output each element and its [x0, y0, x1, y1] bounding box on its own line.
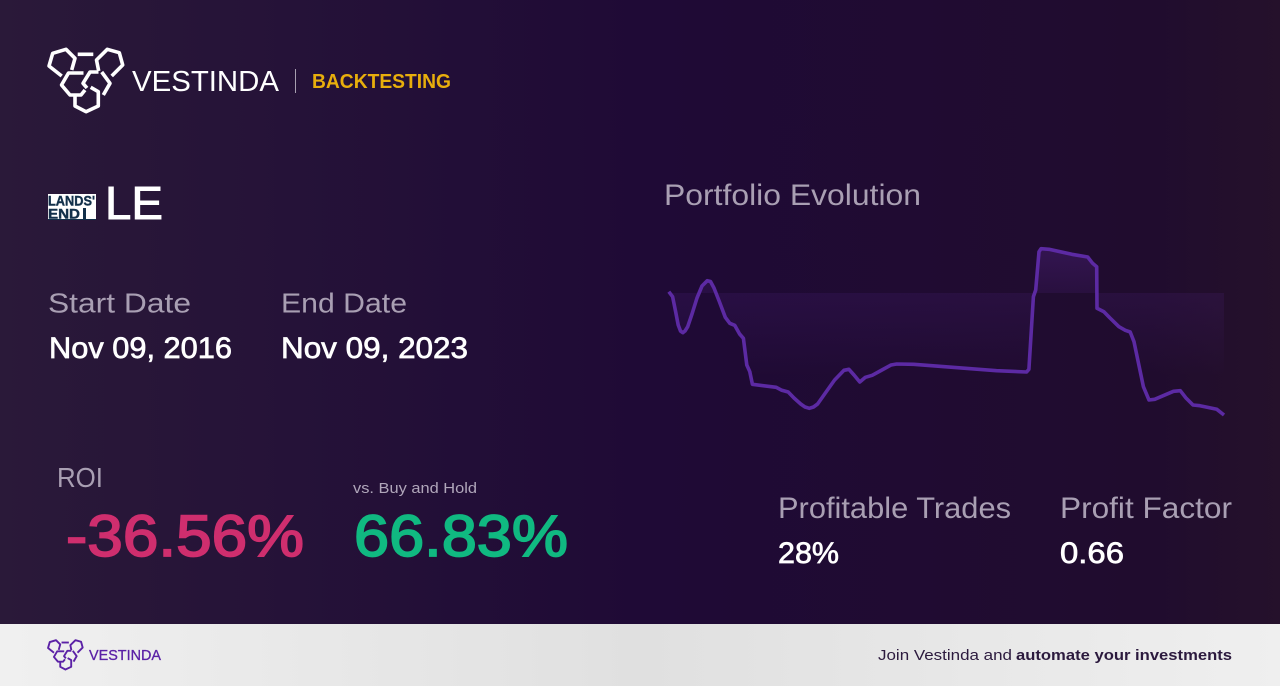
- footer logo: Vestinda hexagons: [48, 640, 83, 669]
- versus buy and hold: [353, 480, 568, 569]
- stat: profit factor: [1060, 492, 1232, 570]
- icon: Lands' End company logo: END: [48, 206, 80, 222]
- end date: End Date: [281, 288, 407, 318]
- ticker: LE: [105, 177, 163, 229]
- stat: profit factor: 0.66: [1060, 537, 1124, 570]
- header divider: [295, 69, 296, 93]
- versus buy and hold: 66.83%: [354, 504, 568, 569]
- stat: profitable trades: 28%: [778, 537, 839, 570]
- ROI: -36.56%: [66, 504, 304, 569]
- stat: profitable trades: [778, 492, 1011, 570]
- header label: backtesting: BACKTESTING: [312, 71, 451, 93]
- versus buy and hold: vs. Buy and Hold: [353, 480, 477, 497]
- footer call to action: Join Vestinda and: [878, 647, 1012, 664]
- footer call to action: [878, 647, 1232, 664]
- start date: Nov 09, 2016: [49, 332, 232, 365]
- chart: portfolio evolution: [669, 249, 1224, 415]
- footer wordmark: VESTINDA: [89, 648, 161, 664]
- stat: profit factor: Profit Factor: [1060, 492, 1232, 525]
- icon: Lands' End company logo: LANDS': [48, 192, 95, 208]
- icon: Lands' End company logo: [48, 192, 96, 222]
- end date: Nov 09, 2023: [281, 332, 468, 365]
- header wordmark: VESTINDA: [132, 66, 279, 98]
- ROI: ROI: [57, 462, 103, 493]
- chart heading: Portfolio Evolution: [664, 179, 921, 212]
- end date: [281, 288, 468, 365]
- footer call to action: automate your investments: [1016, 647, 1232, 664]
- stat: profitable trades: Profitable Trades: [778, 492, 1011, 525]
- start date: Start Date: [48, 288, 191, 318]
- start date: [48, 288, 232, 365]
- ROI: [57, 462, 304, 569]
- footer band: [0, 624, 1280, 686]
- header logo: Vestinda hexagons: [49, 49, 123, 112]
